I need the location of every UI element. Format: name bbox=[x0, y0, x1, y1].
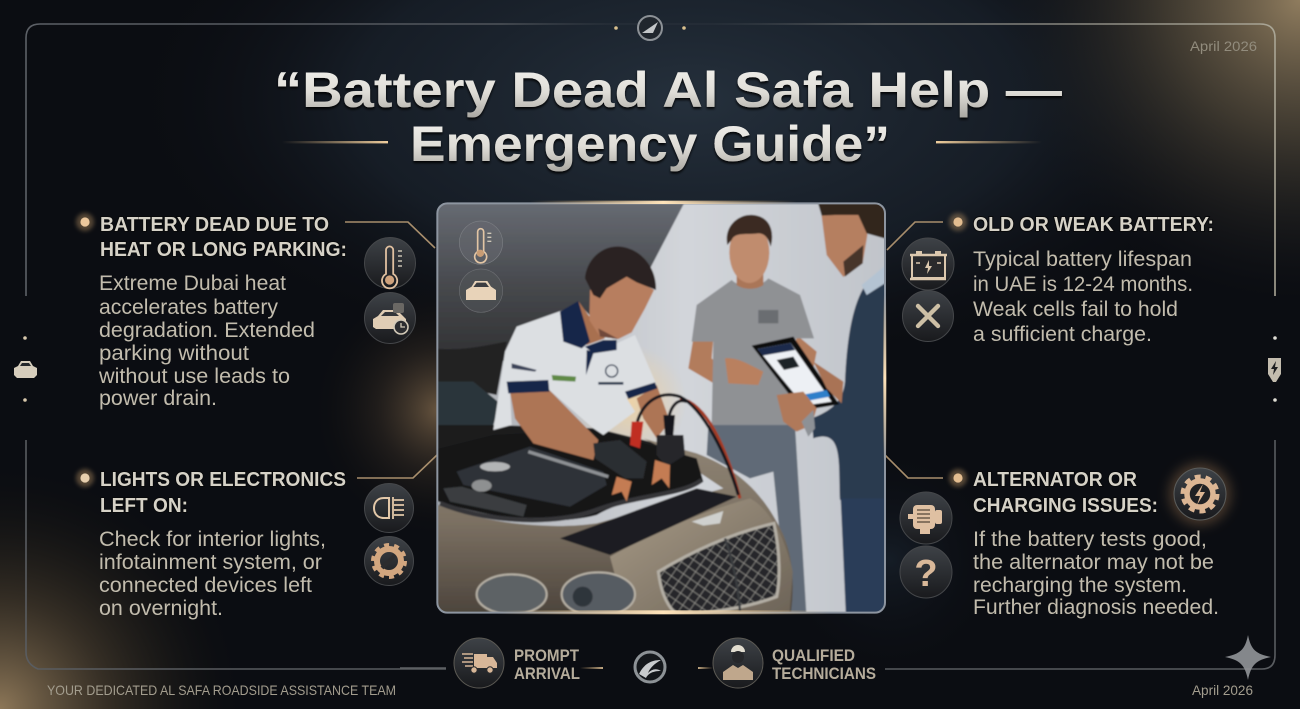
title: Emergency Guide” bbox=[410, 116, 890, 172]
body text: Weak cells fail to hold bbox=[973, 298, 1178, 321]
label: TECHNICIANS bbox=[772, 664, 876, 683]
engine bay bbox=[433, 430, 703, 520]
body text: Check for interior lights, bbox=[99, 528, 326, 551]
icon: technician bbox=[713, 638, 763, 688]
body text: infotainment system, or bbox=[99, 551, 322, 574]
heading bbox=[100, 469, 346, 517]
label: ARRIVAL bbox=[514, 664, 580, 683]
heading bbox=[100, 214, 347, 261]
body text: If the battery tests good, bbox=[973, 528, 1207, 551]
body text: Further diagnosis needed. bbox=[973, 596, 1219, 619]
connector bbox=[345, 222, 435, 248]
photo inset icon: car bbox=[459, 269, 503, 312]
body text bbox=[973, 528, 1219, 619]
icon: headlight bbox=[364, 484, 414, 532]
heading: HEAT OR LONG PARKING: bbox=[100, 239, 347, 261]
body text: Typical battery lifespan bbox=[973, 248, 1192, 271]
icon: cross bbox=[902, 290, 954, 342]
body text: recharging the system. bbox=[973, 574, 1187, 597]
label bbox=[514, 646, 580, 683]
label: PROMPT bbox=[514, 646, 580, 665]
body text: a sufficient charge. bbox=[973, 323, 1152, 346]
bottom feature: prompt arrival bbox=[400, 638, 603, 688]
body text: Extreme Dubai heat bbox=[99, 272, 286, 295]
bullet bbox=[76, 469, 94, 487]
icon: question mark: ? bbox=[914, 553, 938, 595]
tablet bbox=[752, 337, 839, 411]
heading: CHARGING ISSUES: bbox=[973, 495, 1158, 517]
heading: LEFT ON: bbox=[100, 495, 188, 517]
body text bbox=[973, 248, 1193, 346]
panel: lights or electronics bbox=[76, 455, 437, 620]
heading: BATTERY DEAD DUE TO bbox=[100, 214, 329, 236]
body text: power drain. bbox=[99, 387, 217, 410]
label bbox=[772, 646, 876, 683]
icon: gear bolt bbox=[1169, 463, 1231, 525]
body text: degradation. Extended bbox=[99, 319, 315, 342]
photo frame bbox=[437, 201, 886, 614]
heading: OLD OR WEAK BATTERY: bbox=[973, 214, 1214, 236]
body text: on overnight. bbox=[99, 597, 223, 620]
connector bbox=[357, 455, 437, 478]
bullet bbox=[949, 469, 967, 487]
grille bbox=[658, 523, 779, 615]
footer tagline: YOUR DEDICATED AL SAFA ROADSIDE ASSISTANCE TEAM bbox=[47, 682, 396, 698]
heading: ALTERNATOR OR bbox=[973, 469, 1138, 491]
body text: without use leads to bbox=[98, 365, 290, 388]
icon: alternator bbox=[900, 492, 952, 544]
body text: accelerates battery bbox=[99, 296, 278, 319]
central photo: technician jump-starting a car bbox=[433, 198, 890, 618]
jumper cables and clamps bbox=[593, 395, 740, 502]
icon: gear wrench bbox=[364, 536, 414, 586]
bonnet badge bbox=[692, 511, 723, 526]
sparkle star bbox=[1225, 635, 1271, 680]
connector bbox=[887, 222, 943, 250]
date top right: April 2026 bbox=[1190, 38, 1257, 54]
man with tablet bbox=[812, 204, 884, 612]
body text: parking without bbox=[99, 342, 249, 365]
icon: thermometer bbox=[364, 238, 416, 288]
man in grey t-shirt bbox=[688, 215, 817, 618]
car body bbox=[433, 438, 793, 618]
body text bbox=[98, 272, 315, 410]
panel: old or weak battery bbox=[887, 213, 1214, 346]
title accent line left bbox=[282, 141, 388, 143]
icon: question mark bbox=[900, 546, 952, 598]
panel: heat or long parking bbox=[76, 213, 435, 410]
photo inset icon: thermometer bbox=[459, 221, 503, 264]
connector bbox=[885, 455, 943, 478]
icon: parked car clock bbox=[364, 292, 416, 344]
top logo emblem bbox=[614, 16, 686, 40]
photo backdrop bbox=[433, 198, 890, 618]
icon: delivery truck bbox=[454, 638, 504, 688]
panel: alternator or charging issues bbox=[885, 455, 1231, 619]
headlights bbox=[477, 572, 635, 616]
footer date: April 2026 bbox=[1192, 682, 1253, 698]
label: QUALIFIED bbox=[772, 646, 855, 665]
icon: battery bbox=[902, 238, 954, 290]
title: “Battery Dead Al Safa Help — bbox=[274, 62, 1062, 118]
bottom feature: qualified technicians bbox=[698, 638, 876, 688]
side icon: charging bolt bbox=[1268, 336, 1281, 402]
heading: LIGHTS OR ELECTRONICS bbox=[100, 469, 346, 491]
body text: connected devices left bbox=[99, 574, 312, 597]
hand holding tablet bbox=[777, 362, 843, 437]
technician bbox=[493, 247, 670, 460]
car roof and windscreen bbox=[438, 382, 658, 450]
side icon: car bbox=[14, 336, 37, 402]
body text: in UAE is 12-24 months. bbox=[973, 273, 1193, 296]
body text: the alternator may not be bbox=[973, 551, 1214, 574]
heading bbox=[973, 469, 1158, 517]
bullet bbox=[76, 213, 94, 231]
bottom logo emblem bbox=[635, 652, 665, 682]
bullet bbox=[949, 213, 967, 231]
title bbox=[274, 62, 1062, 172]
body text bbox=[99, 528, 326, 620]
title accent line right bbox=[936, 141, 1042, 143]
